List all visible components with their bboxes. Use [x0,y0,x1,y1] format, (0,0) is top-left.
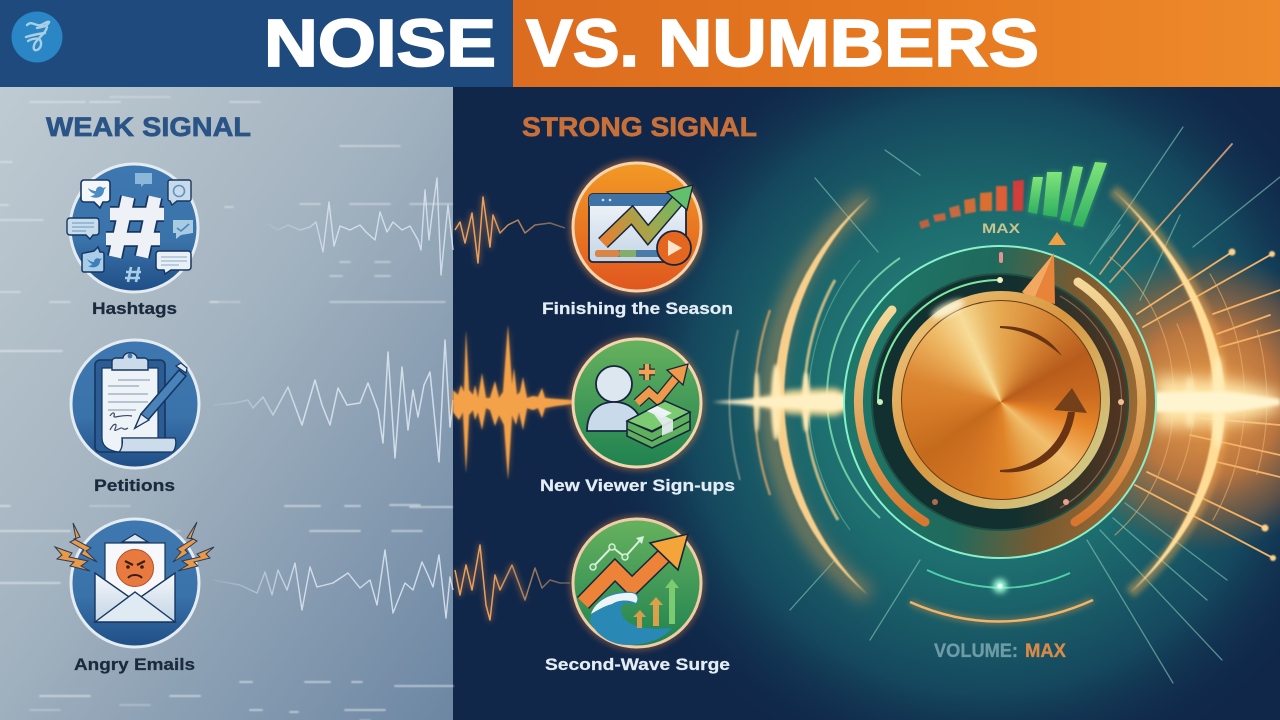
noise streaks [0,97,453,720]
panel: strong signal background [453,87,1280,720]
inner dark ring [872,274,1128,530]
panel: petitions [71,340,199,495]
caption word: volume: VOLUME: [934,641,1018,662]
title: vs. numbers [526,6,1039,81]
logo [12,12,62,62]
panel: finishing the season [542,159,733,318]
label: new viewer sign-ups: New Viewer Sign-ups [540,476,735,495]
icon: hashtags [67,164,198,292]
outer ring [844,246,1156,558]
rotation arrow: top crescent [1000,326,1062,356]
left sound burst and arcs [712,197,900,595]
icon: viewer with plus, arrow and cash [569,335,705,471]
waveform: weak 3 [213,550,453,618]
rotation arrow: bottom curve and head [1000,388,1087,472]
level meter [919,162,1107,245]
waveform: weak 1 [268,178,453,275]
panel: angry emails [55,519,214,674]
caption word: max: MAX [1025,641,1066,662]
title: vs. numbers: VS. [526,6,639,81]
title: vs. numbers: NUMBERS [658,6,1039,81]
waveform: weak 2 [213,340,453,462]
knob highlight [929,296,967,322]
label: second-wave surge: Second-Wave Surge [545,655,730,674]
marker triangle [1048,232,1066,245]
meter bars: green [1028,162,1107,227]
label: finishing the season: Finishing the Season [542,299,733,318]
panel: weak signal background [0,87,453,720]
icon: angry email [55,519,214,647]
waveform: strong 2 [453,325,572,480]
panel: second-wave surge [545,515,730,674]
lower arcs under dial [910,570,1093,622]
indicator dots [877,252,1124,505]
waveform: strong 1 [455,197,565,263]
dial pointer [1022,253,1055,304]
icon: video window with growth arrow [569,159,705,295]
knob face [901,300,1101,500]
caption: volume max [934,641,1066,662]
volume dial [844,246,1156,558]
label: petitions: Petitions [94,476,175,495]
header bar [0,0,1280,87]
right sound burst and arc [1113,190,1280,593]
icon: clipboard and pen [71,340,199,468]
panel: hashtags [67,164,198,318]
icon: wave and surge arrow [569,515,705,651]
ray end glows [1228,248,1276,561]
title: noise: NOISE [264,6,496,81]
green progress arc [878,280,1000,402]
heading: strong signal: STRONG SIGNAL [522,112,757,142]
panel: new viewer sign-ups [540,335,735,495]
gold gauge arc: right [1075,282,1142,522]
heading: weak signal: WEAK SIGNAL [46,112,251,142]
gold gauge arc: left [858,310,925,522]
label: hashtags: Hashtags [92,299,177,318]
radiating rays [790,127,1280,683]
knob rim [892,291,1110,509]
label: angry emails: Angry Emails [74,655,195,674]
waveform: strong 3 [455,545,570,620]
label: max: MAX [982,220,1021,236]
meter bars: red to orange [919,180,1024,229]
